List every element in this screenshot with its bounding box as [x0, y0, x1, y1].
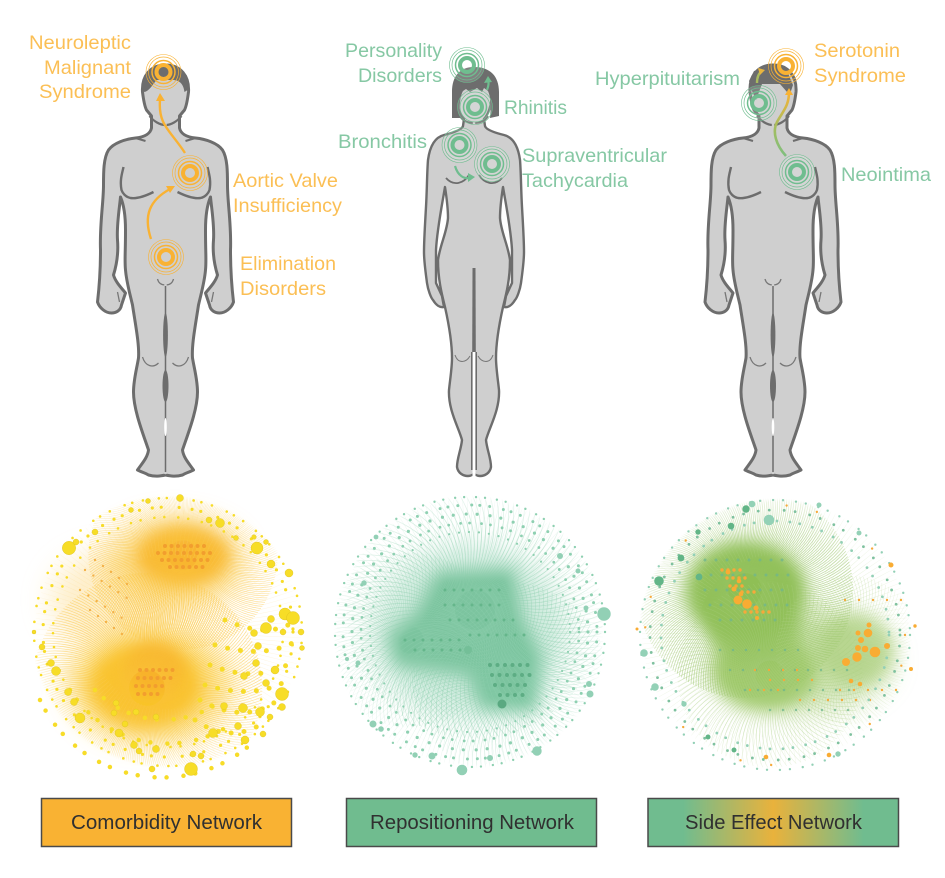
- labels: comorbidity figure: Insufficiency: [233, 195, 342, 217]
- target: rhinitis: [458, 90, 492, 124]
- hair: [452, 67, 499, 118]
- edges: [35, 496, 300, 768]
- target: aortic valve: [172, 156, 208, 190]
- labels: side effect figure: Serotonin: [814, 40, 900, 62]
- labels: comorbidity figure: [29, 32, 342, 300]
- legend: comorbidity network: [42, 798, 292, 846]
- hair: [142, 65, 188, 92]
- edges: [640, 499, 910, 768]
- network: side effect: [636, 498, 917, 772]
- labels: comorbidity figure: Disorders: [240, 278, 326, 300]
- small outer nodes: [34, 498, 302, 778]
- labels: side effect figure: Syndrome: [814, 65, 906, 87]
- body silhouette: [424, 70, 524, 476]
- labels: comorbidity figure: Malignant: [44, 57, 132, 79]
- labels: comorbidity figure: Aortic Valve: [233, 170, 338, 192]
- arrow: rhinitis to personality disorders: [484, 76, 492, 90]
- target: bronchitis: [442, 128, 477, 162]
- orange inner nodes: [722, 570, 905, 700]
- edge density: [686, 542, 893, 710]
- legend: repositioning network: [346, 798, 596, 846]
- legend: comorbidity network: Comorbidity Network: [71, 812, 263, 834]
- hair: [749, 64, 793, 100]
- arrow: elimination to aortic valve: [148, 186, 175, 239]
- legend: side effect network: Side Effect Network: [685, 812, 863, 834]
- large teal nodes: [640, 501, 862, 757]
- figure: female body, repositioning: [424, 48, 524, 476]
- network: comorbidity: [32, 494, 305, 780]
- labels: repositioning figure: [338, 40, 668, 192]
- target: neuroleptic malignant syndrome: [146, 54, 181, 90]
- core nodes: [405, 590, 530, 695]
- teal inner nodes: [700, 560, 860, 710]
- network: repositioning: [334, 496, 611, 776]
- labels: repositioning figure: Personality: [345, 40, 442, 62]
- labels: side effect figure: Neointima: [841, 164, 931, 186]
- arrow: neointima to serotonin syndrome: [775, 88, 793, 156]
- body silhouette: [98, 65, 234, 476]
- target: serotonin syndrome: [768, 48, 804, 84]
- labels: repositioning figure: Supraventricular: [522, 145, 668, 167]
- labels: side effect figure: [595, 40, 931, 186]
- labels: repositioning figure: Rhinitis: [504, 97, 567, 119]
- large nodes: [32, 494, 304, 776]
- legend: side effect network: [648, 798, 898, 846]
- edge density: [50, 520, 243, 740]
- edges: [335, 496, 603, 768]
- large orange nodes: [636, 562, 917, 759]
- labels: comorbidity figure: Syndrome: [39, 81, 131, 103]
- target: elimination disorders: [148, 240, 184, 274]
- edge density: [375, 547, 565, 717]
- small outer nodes: [640, 500, 910, 770]
- arrow: hyperpituitarism to serotonin syndrome: [757, 68, 765, 83]
- target: neointima: [780, 154, 814, 190]
- figure: male body, comorbidity: [98, 54, 234, 476]
- target: supraventricular tachycardia: [474, 146, 510, 182]
- labels: repositioning figure: Bronchitis: [338, 131, 427, 153]
- arrow: aortic valve to brain: [156, 93, 185, 153]
- body silhouette: [705, 65, 841, 476]
- large nodes: [345, 535, 611, 775]
- labels: comorbidity figure: Neuroleptic: [29, 32, 131, 54]
- labels: repositioning figure: Disorders: [358, 65, 442, 87]
- figure: male body, side effect: [705, 48, 841, 476]
- labels: comorbidity figure: Elimination: [240, 253, 336, 275]
- core nodes: [80, 546, 214, 694]
- labels: repositioning figure: Tachycardia: [522, 170, 628, 192]
- target: hyperpituitarism: [742, 86, 776, 120]
- labels: side effect figure: Hyperpituitarism: [595, 68, 740, 90]
- target: personality disorders: [450, 48, 484, 82]
- arrow: bronchitis to tachycardia: [455, 166, 475, 182]
- small outer nodes: [335, 497, 605, 767]
- legend: repositioning network: Repositioning Network: [370, 812, 575, 834]
